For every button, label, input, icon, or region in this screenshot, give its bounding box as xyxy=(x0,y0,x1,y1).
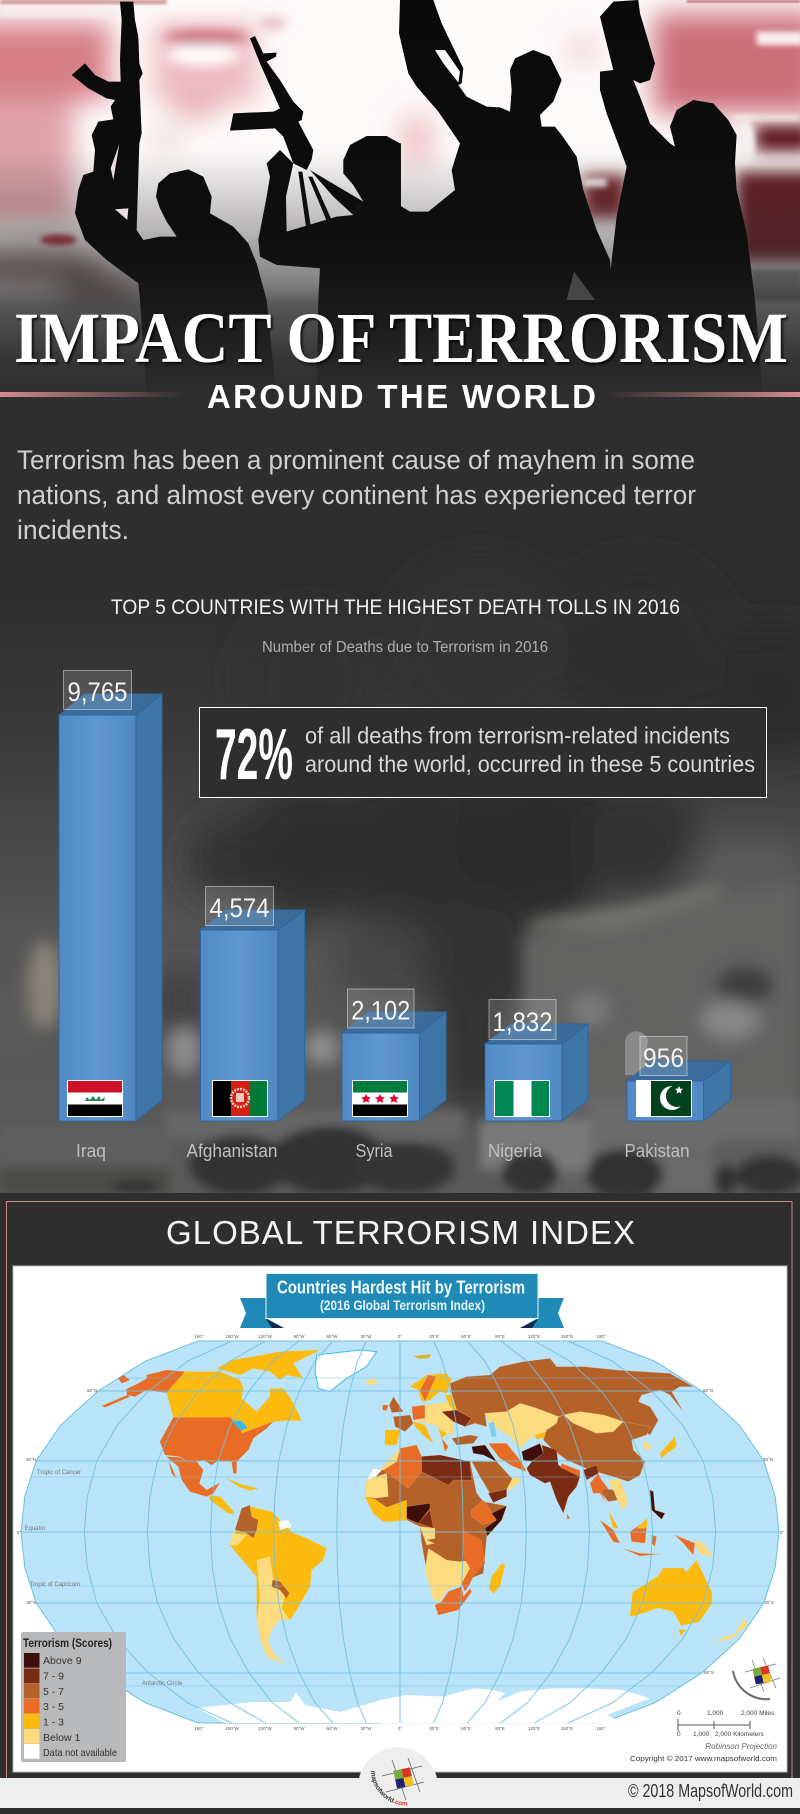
graticule labels: 30°E xyxy=(429,1334,439,1339)
rifle sling gap xyxy=(435,50,595,300)
Kazakhstan and Central Asia xyxy=(485,1403,558,1448)
Oman xyxy=(507,1477,522,1490)
hillside xyxy=(522,881,800,1193)
map card xyxy=(13,1266,787,1772)
Paraguay xyxy=(272,1580,289,1598)
chart subheading: Number of Deaths due to Terrorism in 2016 xyxy=(262,639,548,656)
Myanmar xyxy=(590,1473,612,1503)
legend labels xyxy=(43,1655,117,1759)
graticule xyxy=(21,1341,779,1723)
Bangladesh and Bhutan xyxy=(583,1465,598,1480)
world map: Tropic of Capricorn xyxy=(30,1582,80,1588)
Iceland xyxy=(413,1354,432,1359)
Vietnam and Laos xyxy=(608,1479,628,1510)
Italy and Balkans xyxy=(413,1422,447,1443)
Ethiopia xyxy=(472,1500,497,1525)
northern Borneo xyxy=(637,1518,647,1528)
silhouette: rifle folding stock xyxy=(298,170,363,227)
graticule labels: 0° xyxy=(398,1726,402,1731)
Antarctica west xyxy=(197,1693,381,1723)
scale bar: 0 xyxy=(677,1710,681,1717)
bar: Syria xyxy=(342,1012,446,1121)
graticule labels: 60°E xyxy=(461,1334,471,1339)
China xyxy=(543,1415,650,1482)
legend swatches xyxy=(24,1653,40,1759)
Nepal xyxy=(561,1463,580,1477)
graticule labels: 60°W xyxy=(326,1726,338,1731)
Mauritania xyxy=(365,1473,388,1498)
graticule labels: 120°W xyxy=(258,1334,273,1339)
Africa base xyxy=(365,1445,507,1580)
Ukraine xyxy=(442,1410,472,1427)
Ireland xyxy=(383,1405,388,1411)
scale bar: 1,000 xyxy=(693,1731,710,1738)
legend labels: 7 - 9 xyxy=(43,1670,64,1682)
value label: Iraq 9,765 xyxy=(64,670,132,710)
Spain xyxy=(385,1430,400,1445)
legend labels: Below 1 xyxy=(43,1732,81,1744)
Canada xyxy=(167,1372,302,1433)
legend labels: Data not available xyxy=(43,1747,117,1759)
value label: Nigeria 1,832 xyxy=(489,1000,556,1040)
Central and Eastern Europe xyxy=(413,1402,457,1437)
graticule labels: 90°W xyxy=(293,1334,305,1339)
graticule labels: 30°W xyxy=(360,1334,372,1339)
graticule labels: 90°E xyxy=(495,1726,505,1731)
intro paragraph: incidents. xyxy=(17,515,129,545)
intro paragraph: Terrorism has been a prominent cause of mayhem in some xyxy=(17,445,695,475)
projection note: Robinson Projection xyxy=(705,1742,778,1751)
Scandinavia xyxy=(410,1373,452,1402)
Sumatra xyxy=(600,1520,620,1543)
Tanzania and Mozambique xyxy=(462,1530,485,1592)
Baltics xyxy=(445,1395,457,1412)
country labels: Iraq xyxy=(76,1140,106,1161)
Sulawesi xyxy=(652,1535,657,1547)
world map: Antarctic Circle xyxy=(142,1681,183,1687)
graticule labels: 180° xyxy=(194,1726,204,1731)
graticule labels: 120°E xyxy=(528,1334,540,1339)
Iran xyxy=(488,1443,527,1472)
legend xyxy=(21,1632,126,1762)
value label: Afghanistan 4,574 xyxy=(206,886,274,926)
flag: Nigeria xyxy=(494,1080,550,1117)
Iceland xyxy=(365,1379,378,1385)
graticule labels: 180° xyxy=(596,1726,606,1731)
France xyxy=(393,1415,413,1432)
legend labels: 5 - 7 xyxy=(43,1686,64,1698)
country labels xyxy=(76,1140,690,1161)
Central America xyxy=(208,1495,235,1513)
country labels: Afghanistan xyxy=(186,1140,278,1161)
United Kingdom xyxy=(389,1397,403,1413)
legend labels: Above 9 xyxy=(43,1655,82,1667)
Norway and Sweden xyxy=(420,1375,436,1402)
Madagascar xyxy=(489,1563,505,1593)
map banner: (2016 Global Terrorism Index) xyxy=(320,1298,485,1313)
intro paragraph xyxy=(17,445,696,545)
divider rule: right xyxy=(605,392,800,397)
country labels: Pakistan xyxy=(624,1140,690,1161)
USA xyxy=(160,1417,273,1473)
world map: Tropic of Cancer xyxy=(37,1470,81,1476)
value label: Afghanistan 4,574: 4,574 xyxy=(210,893,270,923)
Greece xyxy=(442,1438,448,1452)
flag: Afghanistan xyxy=(212,1080,268,1117)
Kyrgyzstan xyxy=(535,1432,547,1439)
Russia xyxy=(450,1358,693,1435)
Morocco xyxy=(380,1448,400,1470)
Angola, Namibia, Botswana xyxy=(425,1548,473,1602)
flag: Iraq xyxy=(67,1080,123,1117)
scale bar: 0 xyxy=(677,1731,681,1738)
Sri Lanka xyxy=(567,1513,570,1519)
graticule labels: 0° xyxy=(398,1334,402,1339)
South Africa xyxy=(435,1587,472,1615)
graticule labels: 60°N xyxy=(87,1388,97,1393)
Philippines xyxy=(650,1490,665,1519)
Western Sahara xyxy=(367,1468,382,1482)
Arabia xyxy=(472,1462,513,1493)
legend labels: 3 - 5 xyxy=(43,1701,64,1713)
graticule labels: 30°S xyxy=(764,1600,774,1605)
map banner: Countries Hardest Hit by Terrorism xyxy=(277,1278,525,1298)
graticule labels: 30°E xyxy=(429,1726,439,1731)
Germany xyxy=(412,1405,425,1420)
background photo: smoke over town xyxy=(0,560,800,1200)
bar: Iraq xyxy=(59,694,162,1121)
graticule labels: 60°E xyxy=(461,1726,471,1731)
bar: Pakistan xyxy=(627,1061,730,1121)
Korea xyxy=(643,1440,652,1450)
Arctic islands xyxy=(217,1350,320,1380)
graticule labels: 60°N xyxy=(703,1388,713,1393)
New Guinea west xyxy=(675,1535,695,1555)
graticule labels: 150°E xyxy=(561,1726,573,1731)
Iraq and Syria xyxy=(472,1445,497,1462)
callout: 72% of all deaths: of all deaths from terrorism-related incidents xyxy=(305,722,730,748)
southern Africa and Antarctica xyxy=(380,1530,650,1723)
Great Lakes xyxy=(232,1421,247,1431)
bar chart xyxy=(59,694,730,1121)
New Guinea east xyxy=(695,1540,713,1557)
Australia and New Zealand xyxy=(630,1560,747,1642)
map banner xyxy=(240,1274,564,1328)
Borneo xyxy=(630,1522,647,1543)
Ecuador xyxy=(230,1533,247,1546)
graticule labels: 30°N xyxy=(763,1457,773,1462)
Alaska xyxy=(102,1370,185,1407)
legend: Terrorism (Scores) xyxy=(23,1636,112,1650)
Algeria xyxy=(383,1445,422,1488)
Turkey xyxy=(452,1435,478,1445)
hero: sky with red clouds xyxy=(0,0,800,400)
ocean xyxy=(21,1341,779,1723)
silhouette: centre fighter, left side xyxy=(258,136,401,400)
legend labels: 1 - 3 xyxy=(43,1716,64,1728)
graticule labels: 30°W xyxy=(360,1726,372,1731)
southern tip of South America xyxy=(257,1618,285,1664)
country labels: Syria xyxy=(356,1140,393,1161)
scale bar: 1,000 xyxy=(707,1710,724,1717)
graticule labels: 0° xyxy=(780,1530,784,1535)
graticule labels: 120°E xyxy=(528,1726,540,1731)
silhouette: centre fighter, right side xyxy=(399,0,617,400)
graticule labels: 120°W xyxy=(258,1726,273,1731)
Egypt and Libya xyxy=(420,1455,472,1485)
Somalia xyxy=(485,1506,507,1536)
French Guiana xyxy=(278,1520,292,1530)
West Africa coast xyxy=(365,1497,407,1522)
intro paragraph: nations, and almost every continent has experienced terror xyxy=(17,480,696,510)
rifle sight gaps xyxy=(111,144,128,220)
Afghanistan xyxy=(522,1443,543,1462)
graticule labels: 150°E xyxy=(561,1334,573,1339)
bar: Afghanistan xyxy=(200,910,304,1121)
Colombia xyxy=(235,1505,258,1538)
graticule labels: 0° xyxy=(17,1530,21,1535)
clouds: right half xyxy=(398,0,800,302)
Cameroon xyxy=(418,1510,433,1528)
copyright note: Copyright © 2017 www.mapsofworld.com xyxy=(630,1754,777,1763)
tower xyxy=(625,1031,648,1075)
scale bar: 2,000 Miles xyxy=(741,1710,775,1717)
silhouette: left fighter with raised rifle xyxy=(72,2,277,400)
clouds: left half xyxy=(0,0,287,303)
Antarctica east xyxy=(380,1688,650,1723)
Congo xyxy=(427,1533,463,1562)
Caribbean xyxy=(227,1478,258,1491)
world map xyxy=(17,1334,784,1731)
graticule labels: 30°S xyxy=(26,1600,36,1605)
graticule labels: 90°W xyxy=(293,1726,305,1731)
Greenland xyxy=(315,1350,377,1392)
graticule labels: 180° xyxy=(194,1334,204,1339)
value label: Nigeria 1,832: 1,832 xyxy=(492,1007,552,1037)
graticule labels: 60°W xyxy=(326,1334,338,1339)
value label: Iraq 9,765: 9,765 xyxy=(68,677,128,707)
graticule labels xyxy=(17,1334,784,1731)
panel: global terrorism index xyxy=(0,1193,800,1792)
graticule labels: 150°W xyxy=(225,1726,240,1731)
Bolivia and Chile xyxy=(257,1557,290,1620)
chart heading: TOP 5 COUNTRIES WITH THE HIGHEST DEATH TOLLS IN 2016 xyxy=(111,596,680,619)
graticule labels: 90°E xyxy=(495,1334,505,1339)
silhouette: centre fighter rifle xyxy=(230,36,313,170)
graticule labels: 150°W xyxy=(225,1334,240,1339)
value label: Pakistan 956: 956 xyxy=(643,1043,684,1073)
Malaysia xyxy=(608,1510,618,1528)
divider rule: left xyxy=(0,392,185,397)
Pakistan and India xyxy=(527,1445,580,1513)
Europe, Asia and Africa xyxy=(365,1354,713,1580)
country labels: Nigeria xyxy=(488,1140,543,1161)
Japan xyxy=(660,1437,677,1458)
panel heading: GLOBAL TERRORISM INDEX xyxy=(166,1214,635,1251)
hero: silhouettes, right half xyxy=(399,0,763,400)
value label: Syria 2,102: 2,102 xyxy=(351,996,410,1026)
Mexico xyxy=(167,1457,220,1497)
South America, main xyxy=(230,1507,327,1620)
icon: mapsofworld circular logo xyxy=(359,1747,437,1806)
icon: compass logo on map xyxy=(733,1658,780,1699)
Mongolia xyxy=(563,1412,623,1433)
footer band xyxy=(0,1778,800,1808)
graticule labels: 30°N xyxy=(26,1457,36,1462)
silhouette: right fighter xyxy=(600,0,763,400)
hero: silhouettes, left half xyxy=(72,2,401,400)
value label: Syria 2,102 xyxy=(348,989,414,1028)
Americas xyxy=(102,1350,378,1620)
callout: 72% of all deaths xyxy=(200,708,766,798)
subtitle: AROUND THE WORLD xyxy=(207,378,596,415)
Yemen xyxy=(488,1489,507,1503)
dust and smoke plumes xyxy=(0,885,773,1074)
world map: Equator xyxy=(24,1526,46,1532)
town and trees xyxy=(0,1100,800,1200)
scale bar: 2,000 Kilometers xyxy=(715,1731,765,1738)
flag: Syria xyxy=(352,1080,408,1117)
graticule labels: 60°S xyxy=(704,1670,714,1675)
callout: 72% of all deaths: around the world, occurred in these 5 countries xyxy=(305,751,755,777)
Gabon xyxy=(420,1527,435,1545)
Java xyxy=(622,1548,660,1556)
callout: 72% of all deaths: 72% xyxy=(215,715,293,795)
graticule labels: 180° xyxy=(596,1334,606,1339)
Caspian Sea xyxy=(488,1422,497,1437)
icon: mapsofworld circular logo: mapsofworld.com xyxy=(370,1770,408,1806)
scale bar xyxy=(630,1710,778,1763)
Nigeria xyxy=(407,1503,430,1523)
Thailand and Cambodia xyxy=(602,1488,618,1502)
flag: Pakistan xyxy=(636,1080,692,1117)
bar: Nigeria xyxy=(485,1024,588,1121)
